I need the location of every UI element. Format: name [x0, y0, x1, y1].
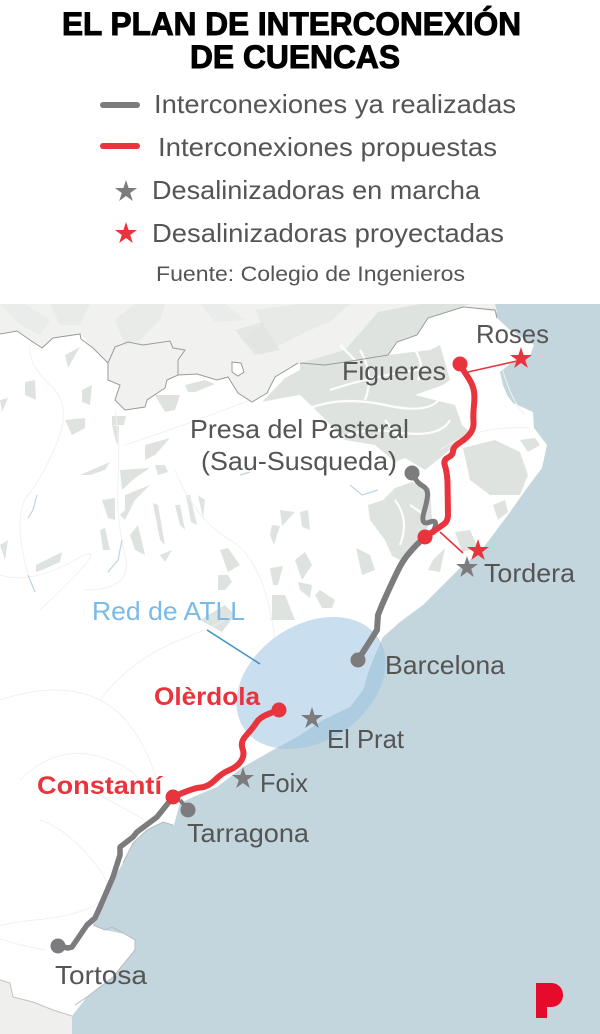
neighbouring territory north: [0, 304, 497, 410]
place labels: Figueres: [342, 356, 446, 386]
sea: [0, 304, 600, 1034]
Tarragona link: [180, 800, 188, 810]
proposed route: Figueres to Tordera: [425, 364, 474, 537]
place labels: Roses: [476, 319, 549, 349]
place labels: Tortosa: [55, 960, 148, 990]
connector lines to planned plants: [440, 361, 517, 553]
place labels: Tarragona: [187, 818, 310, 848]
legend: active desalination plants: Desalinizadoras en marcha: [152, 175, 481, 205]
star: Roses: [510, 347, 532, 368]
legend: planned desalination plants: Desalinizadoras proyectadas: [152, 218, 504, 248]
source: Fuente: Colegio de Ingenieros: [156, 263, 465, 286]
forest patches: [0, 304, 540, 632]
existing route: to Tortosa: [58, 797, 173, 948]
existing route: Pasteral: [412, 473, 436, 534]
proposed route: Olèrdola to Constantí: [173, 710, 279, 797]
place labels: Barcelona: [385, 650, 506, 680]
gray nodes: [50, 466, 420, 954]
ATLL network area: [211, 590, 411, 776]
legend: existing interconnections: Interconexiones ya realizadas: [154, 89, 516, 119]
map: [0, 304, 600, 1034]
rivers and white streaks: [305, 345, 450, 545]
place labels: Presa del Pasteral: [190, 414, 409, 444]
star: Tordera active: [456, 556, 478, 577]
star: Tordera planned: [467, 539, 489, 560]
label: Constantí: Constantí: [37, 772, 163, 800]
place labels: El Prat: [327, 724, 405, 754]
neighbouring territory south: [0, 980, 72, 1034]
place labels: [55, 319, 576, 990]
legend: proposed interconnections: Interconexiones propuestas: [158, 132, 497, 162]
place labels: Tordera: [484, 558, 576, 588]
existing route: to Barcelona: [358, 537, 425, 660]
land: [0, 304, 547, 1034]
title: [62, 6, 521, 75]
title: EL PLAN DE INTERCONEXIÓN: [62, 6, 521, 42]
star: Foix: [232, 767, 254, 788]
ATLL leader line: [207, 630, 260, 664]
label: Olèrdola: Olèrdola: [154, 683, 261, 711]
red nodes: [166, 356, 468, 804]
borders: [0, 307, 497, 1016]
title: DE CUENCAS: [190, 39, 400, 75]
legend: [103, 89, 516, 248]
label: Red de ATLL: Red de ATLL: [92, 596, 245, 626]
place labels: Foix: [260, 768, 308, 798]
logo: [536, 983, 563, 1018]
star: El Prat: [301, 707, 323, 728]
place labels: (Sau-Susqueda): [201, 446, 397, 476]
